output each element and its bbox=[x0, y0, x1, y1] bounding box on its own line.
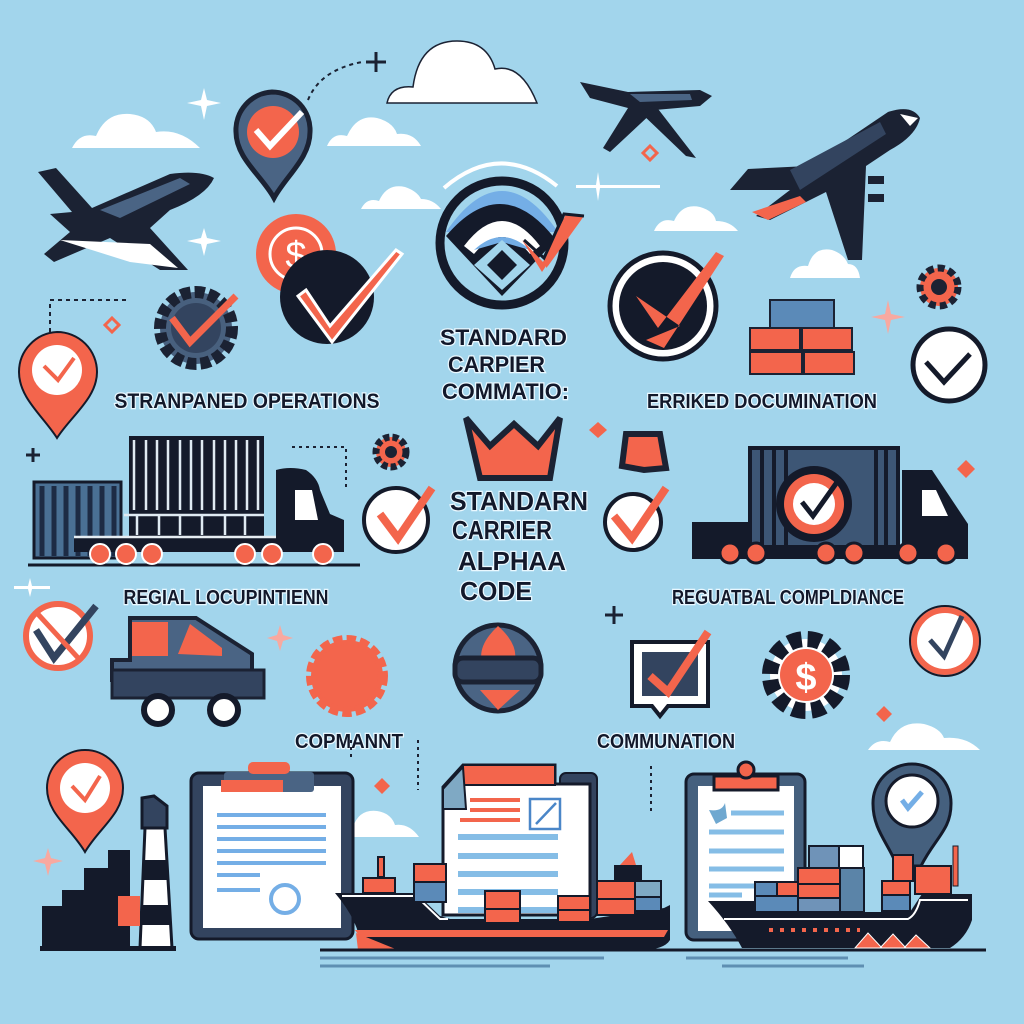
route line: dashed top bbox=[308, 62, 362, 100]
heading: standard carrier alpha code: STANDARN bbox=[450, 486, 588, 516]
document: centre sheet bbox=[443, 765, 597, 918]
heading: communation: COMMUNATION bbox=[597, 731, 735, 753]
icon: dollar coin with check: $ bbox=[285, 235, 307, 277]
icon: crown bbox=[466, 418, 560, 478]
heading: erriked documination: ERRIKED DOCUMINATION bbox=[647, 391, 877, 413]
cloud: lower right bbox=[868, 723, 980, 750]
document: right clipboard bbox=[686, 762, 805, 940]
heading: copmannt: COPMANNT bbox=[295, 731, 403, 753]
icon: dollar coin with check bbox=[256, 214, 402, 344]
decorative sparkle: centre right bbox=[576, 172, 660, 201]
icon: stacked boxes bbox=[750, 300, 854, 374]
decorative sparkle: middle left bbox=[187, 228, 221, 256]
icon: check circle left of centre bbox=[364, 488, 432, 552]
decorative sparkle: coral plus bbox=[871, 300, 905, 334]
icon: framed check bbox=[632, 632, 708, 716]
decorative sparkle: left coral plus bbox=[33, 848, 63, 876]
decorative sparkle: lower coral plus bbox=[267, 625, 293, 651]
cloud: upper middle bbox=[327, 117, 421, 146]
icon: small gear top right bbox=[920, 268, 958, 306]
plus mark: lower right bbox=[605, 606, 623, 624]
heading: streamlined operations: STRANPANED OPERATIONS bbox=[114, 390, 380, 413]
heading: standard carrier alpha code bbox=[450, 486, 588, 606]
icon: gear with check bbox=[160, 292, 236, 364]
ship: centre cargo vessel bbox=[320, 852, 680, 966]
heading: standard carrier commatio: COMMATIO: bbox=[442, 379, 569, 404]
pin: left coral check bbox=[19, 332, 97, 438]
heading: standard carrier alpha code: CARRIER bbox=[452, 515, 552, 545]
plus mark: left bbox=[26, 448, 40, 462]
truck: left container bbox=[28, 436, 360, 565]
pin: lower right blue check bbox=[873, 764, 951, 866]
ship: right cargo vessel bbox=[680, 846, 986, 966]
heading: regial locupintienn: REGIAL LOCUPINTIENN bbox=[124, 587, 328, 609]
route line: dashed centre lower bbox=[351, 740, 651, 815]
plane: top right small bbox=[580, 82, 712, 158]
icon: clock right bbox=[913, 329, 985, 401]
truck: delivery van bbox=[112, 618, 264, 724]
cloud: right middle bbox=[790, 249, 860, 278]
diamond: coral lower right bbox=[876, 706, 892, 722]
icon: small gear left of centre bbox=[376, 437, 406, 467]
heading: regulatory compliance: REGUATBAL COMPLDIANCE bbox=[672, 587, 904, 609]
icon: coral gear bbox=[311, 640, 383, 712]
diamond: coral upper centre bbox=[643, 146, 657, 160]
diamond: coral centre right bbox=[589, 422, 607, 438]
route line: dashed left bbox=[50, 300, 130, 332]
truck: right container bbox=[692, 448, 968, 563]
icon: gear with dollar: $ bbox=[795, 657, 817, 699]
heading: standard carrier commatio bbox=[440, 325, 569, 404]
heading: standard carrier alpha code: ALPHAA bbox=[458, 546, 566, 576]
decorative sparkle: top left bbox=[187, 88, 221, 120]
diamond: coral left bbox=[105, 318, 119, 332]
icon: centre signal badge bbox=[440, 163, 584, 305]
diamond: coral lower bbox=[374, 778, 390, 794]
icon: check circle right bbox=[610, 252, 724, 359]
diamond: coral far right bbox=[957, 460, 975, 478]
lighthouse and stairs bbox=[40, 796, 176, 951]
pin: top check bbox=[236, 92, 310, 198]
decorative sparkle: left of badge row bbox=[14, 578, 50, 597]
icon: small gear right of centre bbox=[622, 434, 666, 470]
plane: top left bbox=[38, 168, 214, 270]
heading: standard carrier commatio: STANDARD bbox=[440, 325, 567, 350]
plane: top right large bbox=[730, 109, 920, 260]
cloud: lower centre bbox=[333, 811, 419, 837]
icon: gear with dollar bbox=[770, 639, 842, 711]
route line: dashed above truck bbox=[292, 447, 346, 490]
cloud: right under plane bbox=[654, 206, 738, 231]
pin: lower left coral check bbox=[47, 750, 123, 852]
icon: no-entry check badge bbox=[26, 604, 96, 668]
icon: check circle right of centre bbox=[605, 488, 666, 550]
icon: timer badge bbox=[910, 606, 980, 676]
plus mark: top bbox=[366, 52, 386, 72]
icon: globe bbox=[455, 625, 541, 711]
cloud: centre left of badge bbox=[361, 186, 441, 209]
heading: standard carrier commatio: CARPIER bbox=[448, 352, 545, 377]
heading: standard carrier alpha code: CODE bbox=[460, 576, 532, 606]
cloud: top left bbox=[72, 114, 200, 148]
document: left clipboard bbox=[191, 762, 353, 939]
cloud: top centre bbox=[387, 41, 537, 103]
